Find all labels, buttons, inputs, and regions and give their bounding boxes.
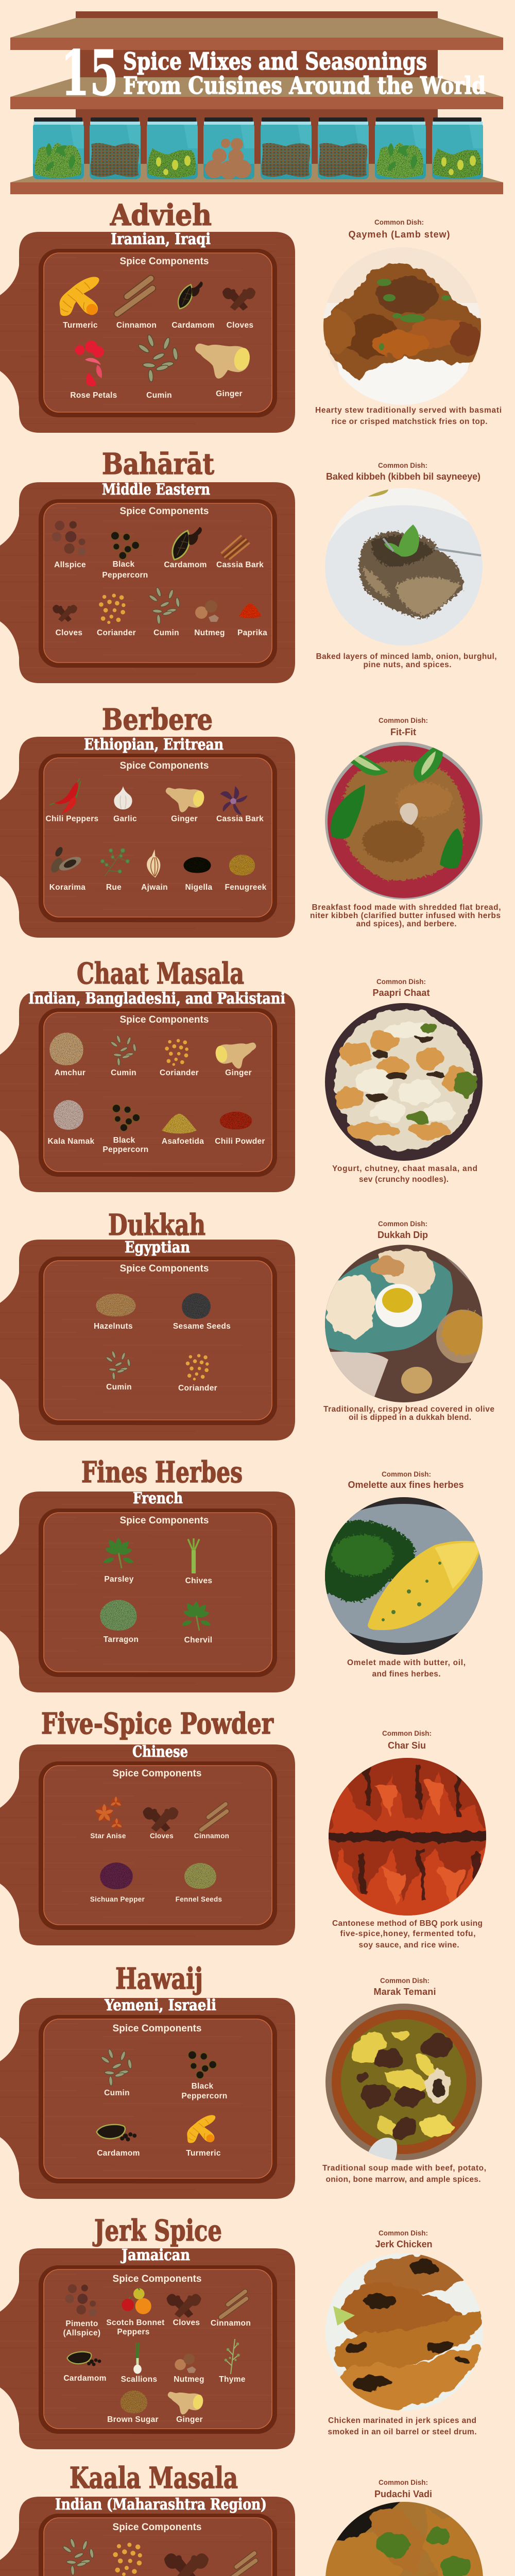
description: sev (crunchy noodles).	[359, 1175, 449, 1184]
description	[323, 1405, 494, 1422]
spice: star anise	[90, 1797, 126, 1840]
region: Ethiopian, Eritrean	[84, 736, 224, 754]
spice: coriander	[178, 1354, 217, 1393]
spice: cloves: Cloves	[56, 629, 82, 637]
jar of nutmeg	[203, 117, 254, 179]
section: Dukkah	[0, 1208, 494, 1440]
spice: fennel seeds	[176, 1863, 222, 1903]
spice: cardamom: Cardamom	[164, 561, 207, 569]
description: and spices), and berbere.	[356, 920, 456, 928]
spice: cumin	[100, 2048, 132, 2097]
spice: cardamom	[171, 281, 215, 330]
spice: cumin: Cumin	[104, 2089, 130, 2097]
spice: ginger	[195, 344, 252, 398]
jar of green herbs	[375, 117, 426, 179]
region: Indian, Bangladeshi, and Pakistani	[28, 990, 285, 1008]
photo: paapri chaat	[321, 999, 486, 1164]
spice: chili peppers: Chili Peppers	[46, 815, 98, 823]
dish name: Baked kibbeh (kibbeh bil sayneeye)	[326, 471, 480, 482]
photo: jerk chicken	[322, 2249, 487, 2414]
photo: omelette	[325, 1497, 483, 1655]
spice: scotch bonnet peppers: Scotch Bonnet	[106, 2318, 165, 2327]
spice: cumin	[106, 1350, 132, 1392]
spice: cumin: Cumin	[153, 629, 179, 637]
section: Chaat Masala	[0, 957, 486, 1192]
spice: parsley: Parsley	[104, 1575, 134, 1584]
spice: cumin: Cumin	[111, 1069, 136, 1077]
spice: black peppercorn: Peppercorn	[181, 2092, 228, 2100]
spice: hazelnuts	[94, 1294, 135, 1331]
panel: spice board	[0, 990, 295, 1192]
spice: sichuan pepper: Sichuan Pepper	[90, 1895, 145, 1903]
spice: coriander: Coriander	[160, 1069, 199, 1077]
spice: rue: Rue	[106, 883, 122, 892]
description: Yogurt, chutney, chaat masala, and	[332, 1164, 477, 1173]
description	[322, 2164, 486, 2184]
spice: cloves	[222, 288, 255, 330]
region: Chinese	[132, 1743, 188, 1761]
spice: cassia bark	[216, 786, 264, 823]
spice: black peppercorn	[181, 2051, 228, 2100]
common dish label: Common Dish:	[376, 978, 426, 986]
spice components heading: Spice Components	[119, 506, 209, 517]
photo: marak temani	[321, 1999, 486, 2164]
panel: spice board	[0, 481, 295, 683]
description: and fines herbes.	[372, 1670, 441, 1679]
spice components heading: Spice Components	[112, 2522, 202, 2533]
spice: nutmeg: Nutmeg	[194, 629, 225, 637]
panel: spice board	[0, 736, 295, 938]
spice: rose petals	[70, 341, 117, 400]
section: Advieh	[0, 198, 502, 433]
region: Yemeni, Israeli	[104, 1996, 216, 2014]
spice: cardamom: Cardamom	[97, 2149, 140, 2158]
spice: ginger: Ginger	[176, 2415, 203, 2424]
region: Jamaican	[120, 2246, 190, 2264]
common dish label: Common Dish:	[380, 1977, 430, 1985]
spice: black peppercorn: Peppercorn	[102, 571, 148, 580]
spice: cumin: Cumin	[106, 1383, 132, 1392]
description: smoked in an oil barrel or steel drum.	[328, 2428, 477, 2436]
spice: cassia bark: Cassia Bark	[216, 561, 264, 569]
description: Hearty stew traditionally served with basmati	[315, 406, 502, 415]
spice: ajwain: Ajwain	[141, 883, 168, 892]
common dish label: Common Dish:	[382, 1470, 431, 1478]
heading: Jerk Spice	[92, 2214, 222, 2248]
spice: tarragon	[100, 1600, 139, 1644]
spice: cinnamon	[116, 278, 157, 330]
spice: pimento allspice: Pimento	[65, 2319, 98, 2328]
spice: sesame seeds	[173, 1293, 231, 1331]
spice: scallions: Scallions	[121, 2375, 157, 2384]
spice: cumin	[62, 2538, 94, 2576]
spice: coriander	[97, 594, 136, 637]
spice: hazelnuts: Hazelnuts	[94, 1322, 133, 1331]
spice: turmeric: Turmeric	[63, 321, 98, 330]
common dish label: Common Dish:	[379, 2229, 428, 2237]
spice: cumin	[138, 334, 179, 400]
description: Baked layers of minced lamb, onion, burghul,	[316, 652, 496, 661]
dish name: Qaymeh (Lamb stew)	[348, 229, 450, 240]
spice: star anise: Star Anise	[90, 1832, 126, 1840]
dish name: Marak Temani	[374, 1987, 436, 1997]
spice: korarima: Korarima	[49, 883, 85, 892]
spice: ginger	[168, 2392, 204, 2424]
spice: paprika	[237, 603, 267, 637]
spice: black peppercorn: Black	[113, 1136, 135, 1145]
spice: coriander	[160, 1039, 199, 1077]
jar of yellow green leaves	[147, 117, 198, 179]
spice: cloves: Cloves	[227, 321, 253, 330]
spice: rue	[100, 849, 129, 892]
description	[332, 1919, 483, 1950]
spice: pimento allspice	[63, 2284, 100, 2337]
spice: amchur	[49, 1032, 85, 1077]
description: Breakfast food made with shredded flat bread,	[312, 903, 501, 912]
panel: spice board	[0, 1489, 295, 1692]
spice: pimento allspice: (Allspice)	[63, 2329, 100, 2337]
spice: cardamom	[97, 2125, 140, 2158]
spice: cloves	[143, 1807, 179, 1840]
spice components heading: Spice Components	[119, 1263, 209, 1274]
common dish label: Common Dish:	[379, 2479, 428, 2486]
description	[328, 2416, 477, 2436]
spice: kala namak	[48, 1100, 95, 1146]
common dish label: Common Dish:	[379, 717, 428, 724]
description: Omelet made with butter, oil,	[347, 1658, 466, 1667]
description	[315, 406, 502, 426]
spice: cinnamon	[194, 1804, 229, 1840]
description: Chicken marinated in jerk spices and	[328, 2416, 476, 2425]
spice: turmeric	[186, 2115, 221, 2158]
spice: garlic	[113, 786, 137, 823]
description: pine nuts, and spices.	[364, 660, 451, 669]
title: Spice Mixes and Seasonings	[123, 47, 427, 75]
jar of brown seeds	[318, 117, 369, 179]
description: niter kibbeh (clarified butter infused with herbs	[310, 911, 501, 920]
spice: cardamom: Cardamom	[63, 2374, 107, 2383]
panel: spice board	[0, 1239, 295, 1440]
common dish label: Common Dish:	[378, 1220, 427, 1228]
spice components heading: Spice Components	[112, 2274, 202, 2284]
panel: spice board	[0, 230, 295, 433]
spice: brown sugar	[107, 2391, 159, 2424]
spice: cinnamon	[222, 2553, 263, 2576]
photo: pudachi vadi	[322, 2498, 487, 2576]
spice: kala namak: Kala Namak	[48, 1137, 95, 1146]
spice: cumin: Cumin	[146, 391, 172, 400]
spice: black peppercorn: Peppercorn	[102, 1145, 149, 1154]
dish name: Fit-Fit	[390, 727, 416, 737]
spice: tarragon: Tarragon	[104, 1635, 139, 1644]
spice: cinnamon: Cinnamon	[211, 2319, 251, 2328]
spice: chervil: Chervil	[184, 1636, 212, 1645]
photo: qaymeh	[323, 263, 481, 405]
spice: black peppercorn	[102, 1105, 149, 1154]
spice: nigella	[184, 857, 213, 892]
spice: asafoetida	[162, 1114, 204, 1146]
spice: brown sugar: Brown Sugar	[107, 2415, 159, 2424]
dish name: Jerk Chicken	[375, 2239, 433, 2249]
photo: baked kibbeh	[321, 482, 486, 649]
dish name: Pudachi Vadi	[374, 2489, 432, 2499]
spice: chili powder	[215, 1112, 265, 1146]
heading: Berbere	[102, 703, 213, 737]
spice: chives	[185, 1538, 212, 1585]
spice: scotch bonnet peppers: Peppers	[117, 2328, 150, 2336]
spice: nutmeg	[174, 2353, 204, 2384]
heading: Fines Herbes	[81, 1455, 243, 1489]
spice: coriander: Coriander	[97, 629, 136, 637]
description: Traditionally, crispy bread covered in olive	[323, 1405, 494, 1414]
spice components heading: Spice Components	[119, 1014, 209, 1025]
photo: fit-fit	[321, 738, 486, 903]
spice: ginger	[214, 1043, 256, 1077]
spice components heading: Spice Components	[119, 760, 209, 771]
spice: black peppercorn: Black	[192, 2082, 214, 2091]
spice: cloves	[166, 2294, 201, 2327]
spice: scotch bonnet peppers	[106, 2288, 165, 2336]
description	[316, 652, 496, 669]
spice: coriander: Coriander	[178, 1384, 217, 1393]
description: oil is dipped in a dukkah blend.	[349, 1413, 471, 1422]
common dish label: Common Dish:	[378, 462, 427, 469]
heading: Chaat Masala	[77, 957, 244, 991]
spice: amchur: Amchur	[55, 1069, 85, 1077]
dish name: Paapri Chaat	[373, 988, 430, 998]
spice: paprika: Paprika	[237, 629, 267, 637]
spice: ajwain	[141, 849, 168, 892]
dish name: Char Siu	[388, 1740, 426, 1751]
spice components heading: Spice Components	[112, 2023, 202, 2034]
spice: rose petals: Rose Petals	[70, 391, 117, 400]
spice: cassia bark	[216, 535, 264, 569]
spice: cardamom: Cardamom	[171, 321, 215, 330]
spice: cumin	[148, 587, 180, 637]
section: Fines Herbes	[0, 1455, 507, 1692]
panel: spice board	[0, 1743, 295, 1945]
spice shelf illustration	[10, 11, 503, 194]
spice: allspice: Allspice	[54, 561, 86, 569]
common dish label: Common Dish:	[382, 1730, 432, 1737]
spice: corriander	[108, 2543, 150, 2576]
jar of green herbs	[33, 117, 84, 179]
jar of dark seeds	[261, 117, 312, 179]
spice: cinnamon: Cinnamon	[194, 1832, 229, 1840]
panel: spice board	[0, 2496, 295, 2576]
heading: Dukkah	[108, 1208, 205, 1242]
section: Jerk Spice	[0, 2214, 487, 2449]
heading: Hawaij	[115, 1962, 203, 1996]
spice: chili peppers	[46, 778, 98, 823]
region: Indian (Maharashtra Region)	[55, 2496, 267, 2514]
heading: Advieh	[110, 198, 212, 232]
description	[332, 1164, 477, 1184]
spice: cinnamon	[211, 2292, 251, 2328]
description	[347, 1658, 466, 1679]
spice: chives: Chives	[185, 1577, 212, 1585]
region: Egyptian	[125, 1239, 190, 1257]
spice: cloves	[164, 2553, 209, 2576]
spice: cassia bark: Cassia Bark	[216, 815, 264, 823]
spice: fenugreek: Fenugreek	[225, 883, 267, 892]
spice: fennel seeds: Fennel Seeds	[176, 1895, 222, 1903]
spice: fenugreek	[225, 855, 267, 892]
spice: thyme	[219, 2339, 246, 2384]
region: French	[133, 1489, 183, 1507]
spice: sesame seeds: Sesame Seeds	[173, 1322, 231, 1331]
spice: nigella: Nigella	[185, 883, 213, 892]
jar of brown seeds	[90, 117, 141, 179]
spice: turmeric: Turmeric	[186, 2149, 221, 2158]
spice: sichuan pepper	[90, 1862, 145, 1903]
title	[61, 37, 486, 110]
spice: cloves	[53, 605, 82, 637]
heading: Five-Spice Powder	[41, 1707, 274, 1741]
heading: Bahārāt	[102, 447, 214, 481]
panel: spice board	[0, 2246, 295, 2449]
spice: cinnamon: Cinnamon	[116, 321, 157, 330]
spice: ginger: Ginger	[216, 389, 243, 398]
section: Kaala Masala	[0, 2461, 487, 2576]
spice: chervil	[181, 1601, 212, 1645]
section: Five-Spice Powder	[0, 1707, 490, 1950]
spice: nutmeg	[194, 600, 225, 637]
panel: spice board	[0, 1996, 295, 2199]
spice: black peppercorn: Black	[113, 560, 135, 569]
description: Cantonese method of BBQ pork using	[332, 1919, 483, 1928]
region: Iranian, Iraqi	[111, 230, 211, 248]
description	[310, 903, 501, 928]
spice: korarima	[49, 846, 85, 892]
description: soy sauce, and rice wine.	[358, 1941, 459, 1950]
spice: turmeric	[60, 277, 99, 330]
spice: thyme: Thyme	[219, 2375, 246, 2384]
section: Hawaij	[0, 1962, 486, 2199]
spice components heading: Spice Components	[112, 1768, 202, 1779]
spice: cloves: Cloves	[173, 2318, 200, 2327]
spice: garlic: Garlic	[113, 815, 137, 823]
description: five-spice,honey, fermented tofu,	[340, 1929, 476, 1938]
region: Middle Eastern	[102, 481, 210, 499]
description: onion, bone marrow, and ample spices.	[325, 2175, 481, 2184]
spice: cloves: Cloves	[150, 1832, 174, 1840]
spice components heading: Spice Components	[119, 1515, 209, 1526]
photo: dukkah dip	[325, 1245, 483, 1402]
section: Baharat	[0, 447, 496, 683]
section: Berbere	[0, 703, 501, 938]
spice: cardamom	[63, 2352, 107, 2383]
spice: cardamom	[164, 527, 207, 569]
photo: char siu	[325, 1754, 490, 1919]
spice: parsley	[102, 1538, 134, 1584]
spice: ginger: Ginger	[225, 1069, 252, 1077]
description: Traditional soup made with beef, potato,	[322, 2164, 486, 2173]
dish name: Omelette aux fines herbes	[348, 1480, 464, 1490]
description: rice or crisped matchstick fries on top.	[332, 417, 487, 426]
spice: asafoetida: Asafoetida	[162, 1137, 204, 1146]
spice: scallions	[121, 2343, 157, 2384]
spice: black peppercorn	[102, 532, 148, 580]
title: 15	[61, 37, 118, 110]
spice: nutmeg: Nutmeg	[174, 2375, 204, 2384]
spice: allspice	[52, 521, 86, 569]
heading: Kaala Masala	[70, 2461, 238, 2495]
spice: ginger	[166, 788, 205, 823]
dish name: Dukkah Dip	[377, 1230, 428, 1240]
spice components heading: Spice Components	[119, 256, 209, 267]
spice: ginger: Ginger	[171, 815, 198, 823]
jar of yellow green leaves	[432, 117, 483, 179]
spice: chili powder: Chili Powder	[215, 1137, 265, 1146]
common dish label: Common Dish:	[374, 218, 424, 226]
spice: cumin	[110, 1035, 136, 1077]
